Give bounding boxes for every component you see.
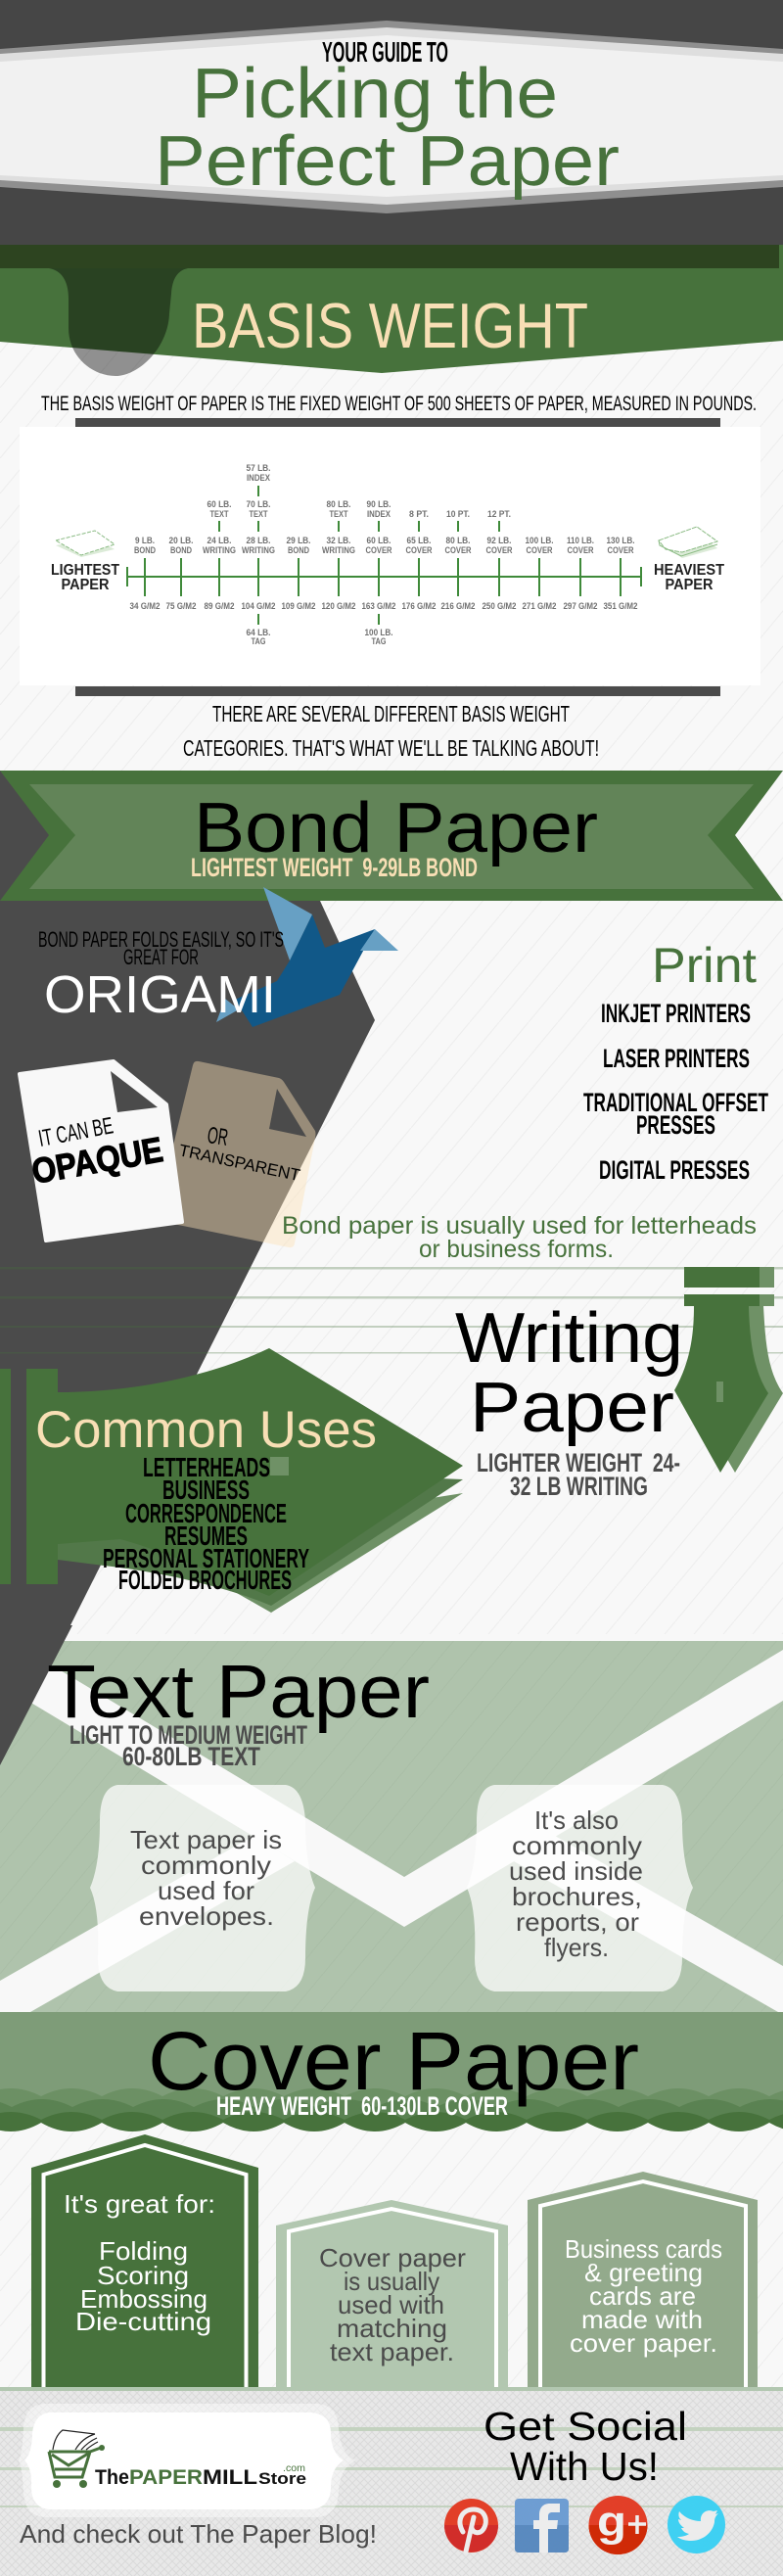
label: lightest paper: LIGHTEST: [51, 562, 119, 579]
timeline labels: WRITING: [242, 545, 275, 555]
timeline labels: 176 G/M2: [401, 601, 437, 611]
timeline labels: 250 G/M2: [482, 601, 517, 611]
timeline labels: 271 G/M2: [523, 601, 556, 611]
card: matching text paper: [276, 2200, 508, 2387]
timeline axis: [127, 486, 641, 625]
timeline labels: COVER: [366, 545, 392, 555]
panel: basis weight timeline: [20, 418, 760, 696]
callout: brochures: reports, or: [516, 1907, 639, 1937]
panel: print uses: [282, 938, 768, 1263]
logo wordmark: PAPER: [129, 2466, 203, 2489]
list: common uses: PERSONAL STATIONERY: [103, 1543, 309, 1573]
list: common uses: CORRESPONDENCE: [125, 1498, 287, 1528]
panel: cover paper banner: [0, 2012, 783, 2131]
list: print methods: PRESSES: [636, 1110, 715, 1140]
timeline labels: 100 LB.: [525, 536, 554, 545]
timeline labels: 100 LB.: [364, 628, 393, 637]
heading: get social: [484, 2404, 687, 2489]
timeline labels: 34 G/M2: [129, 601, 161, 611]
logo domain: .com: [283, 2463, 305, 2474]
timeline labels: INDEX: [247, 473, 270, 483]
heading: print: Print: [652, 938, 757, 993]
heading: cover paper: Cover Paper: [148, 2015, 639, 2107]
timeline labels: 60 LB.: [207, 499, 231, 509]
label: heaviest paper: PAPER: [666, 577, 714, 593]
card: business cards: [528, 2172, 758, 2387]
timeline labels: 90 LB.: [366, 499, 392, 509]
card: business cards: cover paper.: [570, 2328, 717, 2358]
icon: pen nib, common uses: [0, 1348, 463, 1613]
timeline labels: 9 LB.: [135, 536, 155, 545]
list: common uses: LETTERHEADS: [143, 1452, 270, 1482]
ribbon: bond paper: [0, 771, 783, 901]
timeline labels: 104 G/M2: [241, 601, 276, 611]
heading: get social: With Us!: [510, 2444, 659, 2489]
subheading: writing weight: [477, 1448, 680, 1501]
icon: thin paper: [56, 531, 115, 557]
timeline labels: 8 PT.: [409, 509, 429, 519]
list: print methods: [583, 999, 768, 1185]
timeline labels: BOND: [288, 545, 309, 555]
callout: brochures: brochures,: [512, 1882, 642, 1911]
card: matching text paper: Cover paper: [319, 2243, 466, 2272]
label: or: OR: [206, 1122, 230, 1151]
text: origami: GREAT FOR: [123, 945, 199, 969]
heading: text paper: Text Paper: [47, 1650, 430, 1734]
timeline labels: 297 G/M2: [564, 601, 597, 611]
timeline labels: 109 G/M2: [282, 601, 315, 611]
timeline labels: 92 LB.: [487, 536, 511, 545]
eyebrow: your guide to: YOUR GUIDE TO: [322, 37, 448, 69]
card: matching text paper: is usually: [344, 2267, 439, 2296]
callout: envelopes: used for: [158, 1876, 254, 1905]
heading: basis weight: BASIS WEIGHT: [192, 290, 588, 361]
timeline labels: 216 G/M2: [440, 601, 476, 611]
title: [155, 55, 620, 201]
timeline labels: 120 G/M2: [321, 601, 356, 611]
panel: basis weight banner: [0, 245, 783, 376]
caption: bond paper use: or business forms.: [419, 1236, 614, 1263]
timeline labels: 10 PT.: [446, 509, 470, 519]
logo wordmark: The: [95, 2466, 129, 2489]
timeline labels: 89 G/M2: [204, 601, 235, 611]
callout: brochures: flyers.: [544, 1933, 609, 1962]
card: business cards: made with: [581, 2305, 703, 2334]
timeline labels: TEXT: [209, 509, 229, 519]
logo wordmark: [95, 2466, 306, 2489]
timeline labels: TEXT: [249, 509, 268, 519]
card: great for: [31, 2134, 258, 2387]
icon: transparent sheet: [173, 1061, 315, 1247]
panel: writing paper heading: [455, 1299, 683, 1501]
timeline labels: 32 LB.: [327, 536, 350, 545]
timeline labels: COVER: [485, 545, 513, 555]
timeline labels: WRITING: [322, 545, 355, 555]
list: common uses: RESUMES: [164, 1521, 248, 1551]
dark background wedge: [0, 771, 375, 1765]
heading: writing paper: [455, 1299, 683, 1447]
heading: common uses: Common Uses: [35, 1401, 377, 1459]
timeline labels: 351 G/M2: [603, 601, 638, 611]
caption: bond paper use: [282, 1212, 757, 1263]
callout: envelopes: commonly: [141, 1850, 271, 1880]
timeline labels: 70 LB.: [247, 499, 270, 509]
card: great for: Scoring: [97, 2261, 189, 2290]
timeline labels: TAG: [251, 636, 266, 646]
list: common uses: BUSINESS: [162, 1475, 250, 1505]
label: it can be: IT CAN BE: [36, 1112, 115, 1152]
timeline labels: 80 LB.: [327, 499, 350, 509]
heading: get social: Get Social: [484, 2404, 687, 2449]
callout: brochures: used inside: [509, 1856, 643, 1886]
timeline labels: 64 LB.: [247, 628, 270, 637]
card: business cards: Business cards: [565, 2234, 722, 2264]
callout: brochures: commonly: [512, 1831, 642, 1860]
subheading: writing weight: 32 LB WRITING: [510, 1472, 648, 1501]
icon: heavy paper: [659, 527, 717, 558]
callout: envelopes: Text paper is: [130, 1825, 282, 1854]
icon: twitter: [668, 2496, 725, 2553]
callout: brochures: It's also: [534, 1805, 619, 1835]
panel: footer: [0, 2387, 783, 2576]
closing text for basis weight: THERE ARE SEVERAL DIFFERENT BASIS WEIGHT: [212, 701, 570, 726]
subheading: text weight: LIGHT TO MEDIUM WEIGHT: [69, 1720, 307, 1750]
timeline labels: 163 G/M2: [362, 601, 395, 611]
heading: writing paper: Writing: [455, 1299, 683, 1378]
logo wordmark: Store: [258, 2469, 306, 2488]
icon: fountain pen: [674, 1267, 783, 1473]
title: Perfect Paper: [155, 122, 620, 201]
icon: opaque sheet: [20, 1061, 182, 1241]
callout: brochures: [467, 1785, 693, 1991]
timeline labels: 12 PT.: [487, 509, 511, 519]
callout: envelopes: envelopes.: [139, 1901, 274, 1931]
panel: text paper envelope: [0, 1625, 783, 2012]
timeline labels: 75 G/M2: [166, 601, 196, 611]
timeline labels: 110 LB.: [567, 536, 594, 545]
ruled lines: [0, 1267, 783, 1353]
label: lightest paper: [51, 562, 119, 593]
card: matching text paper: text paper.: [330, 2337, 454, 2366]
label: heaviest paper: [654, 562, 724, 593]
timeline labels: BOND: [170, 545, 192, 555]
timeline labels: BOND: [134, 545, 156, 555]
icon: facebook: [515, 2499, 569, 2553]
timeline labels: 29 LB.: [286, 536, 311, 545]
timeline labels: 28 LB.: [247, 536, 270, 545]
closing text for basis weight: [183, 701, 599, 761]
label: lightest paper: PAPER: [61, 577, 110, 593]
icon: google plus: g: [597, 2498, 626, 2546]
list: common uses: [103, 1452, 309, 1595]
card: great for: Embossing: [80, 2284, 207, 2314]
icon: google plus: [589, 2496, 648, 2554]
timeline labels: 130 LB.: [607, 536, 634, 545]
icon: origami crane: [216, 887, 398, 1027]
card: matching text paper: matching: [337, 2314, 447, 2343]
timeline labels: WRITING: [203, 545, 236, 555]
icon: shopping cart: [49, 2430, 105, 2488]
logo bubble: [19, 2404, 355, 2517]
timeline labels: COVER: [607, 545, 634, 555]
timeline labels: COVER: [405, 545, 433, 555]
caption: bond paper use: Bond paper is usually used for letterheads: [282, 1212, 757, 1240]
icon: pinterest: [444, 2499, 498, 2553]
timeline labels: TAG: [372, 636, 386, 646]
timeline labels: 65 LB.: [407, 536, 431, 545]
text: origami: BOND PAPER FOLDS EASILY, SO IT'S: [38, 927, 284, 952]
label: opaque: OPAQUE: [28, 1129, 165, 1192]
heading: writing paper: Paper: [470, 1369, 674, 1447]
timeline labels: 80 LB.: [446, 536, 470, 545]
subheading: bond weight: LIGHTEST WEIGHT 9-29LB BOND: [191, 853, 478, 882]
timeline labels: COVER: [527, 545, 553, 555]
text: origami: [38, 927, 284, 1024]
timeline labels: 57 LB.: [247, 463, 270, 473]
timeline labels: COVER: [568, 545, 594, 555]
closing text for basis weight: CATEGORIES. THAT'S WHAT WE'LL BE TALKING ABOUT!: [183, 735, 599, 761]
card: great for: It's great for:: [64, 2189, 215, 2219]
card: business cards: & greeting: [584, 2258, 703, 2287]
title: Picking the: [192, 55, 558, 133]
text: origami: ORIGAMI: [44, 965, 276, 1024]
callout: envelopes: [90, 1785, 315, 1991]
timeline labels: INDEX: [367, 509, 391, 519]
timeline labels: [129, 463, 638, 646]
logo wordmark: MILL: [203, 2466, 257, 2489]
icon: paper drop tab: [49, 268, 188, 376]
card: matching text paper: used with: [338, 2290, 444, 2319]
text: paper blog: And check out The Paper Blog!: [20, 2519, 377, 2549]
timeline labels: COVER: [444, 545, 472, 555]
header panel: [0, 0, 783, 245]
timeline labels: 20 LB.: [168, 536, 194, 545]
timeline labels: TEXT: [329, 509, 348, 519]
label: heaviest paper: HEAVIEST: [654, 562, 724, 579]
subheading: writing weight: LIGHTER WEIGHT 24-: [477, 1448, 680, 1477]
card: great for: Folding: [99, 2236, 188, 2266]
timeline labels: 24 LB.: [207, 536, 231, 545]
label: transparent: TRANSPARENT: [177, 1141, 301, 1185]
subheading: cover weight: HEAVY WEIGHT 60-130LB COVER: [216, 2091, 508, 2121]
card: great for: Die-cutting: [75, 2307, 211, 2336]
subheading: text weight: [69, 1720, 307, 1771]
list: common uses: FOLDED BROCHURES: [118, 1565, 292, 1595]
timeline labels: 60 LB.: [366, 536, 392, 545]
heading: bond paper: Bond Paper: [194, 789, 598, 867]
card: business cards: cards are: [589, 2281, 696, 2311]
subheading: text weight: 60-80LB TEXT: [122, 1742, 260, 1771]
